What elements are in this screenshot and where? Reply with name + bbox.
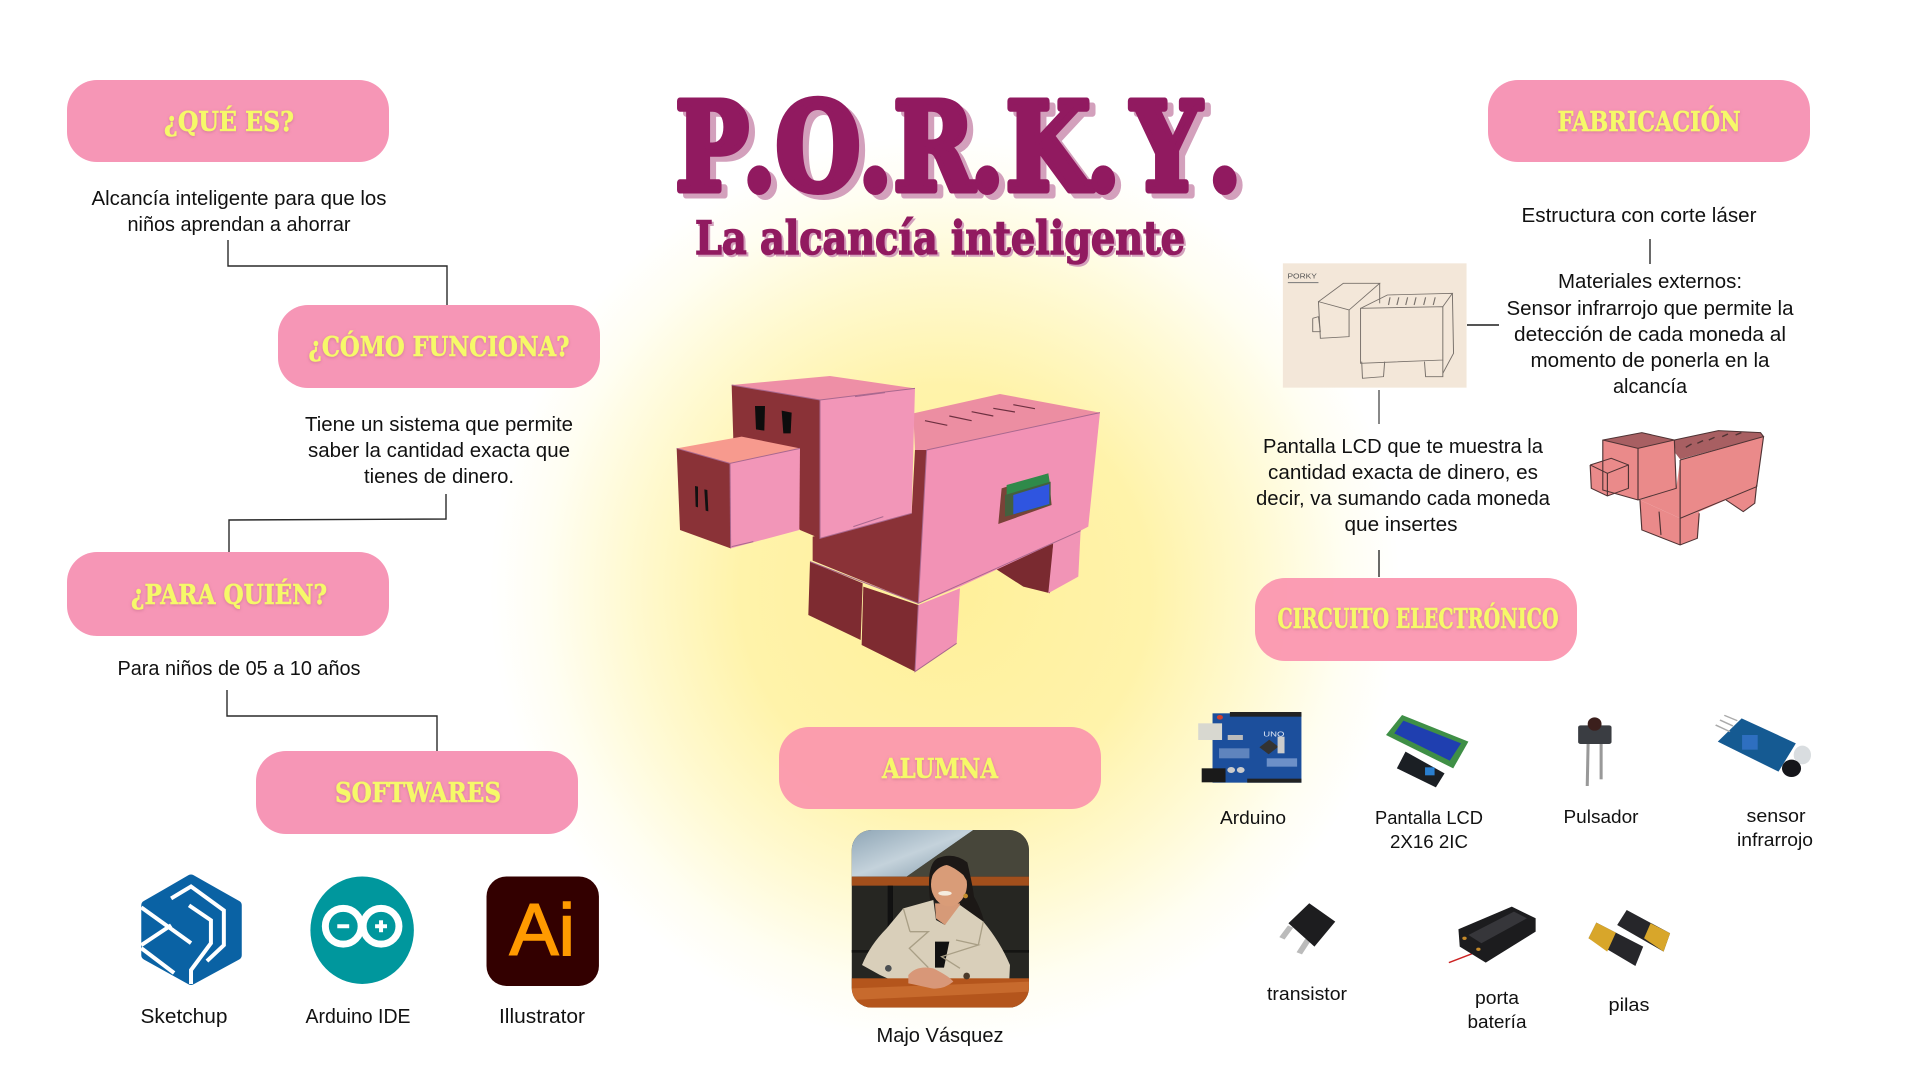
text: cómo funciona description: Tiene un sistema que permite bbox=[305, 414, 573, 436]
text: external materials bbox=[1506, 271, 1794, 398]
label: arduino: Arduino bbox=[1220, 807, 1286, 828]
text: lcd screen description: cantidad exacta de dinero, es bbox=[1268, 462, 1538, 484]
icon: battery holder bbox=[1449, 907, 1536, 963]
text: qué es description: Alcancía inteligente para que los bbox=[92, 188, 386, 210]
text: external materials: momento de ponerla en la bbox=[1530, 350, 1770, 372]
icon: 3d model of pig bbox=[1590, 431, 1764, 545]
heading pill: alumna: ALUMNA bbox=[881, 754, 999, 785]
text: qué es description bbox=[92, 188, 386, 236]
panel: alumna bbox=[779, 727, 1101, 1047]
label: battery holder bbox=[1468, 987, 1527, 1032]
sketch: hand drawn pig plan: PORKY bbox=[1287, 272, 1318, 280]
text: external materials: detección de cada moneda al bbox=[1514, 324, 1786, 346]
icon: arduino board bbox=[1198, 712, 1301, 783]
subtitle: La alcancía inteligente bbox=[695, 211, 1185, 265]
photo: student portrait bbox=[852, 830, 1029, 1008]
label: arduino ide: Arduino IDE bbox=[306, 1006, 410, 1028]
sketch: hand drawn pig plan bbox=[1283, 263, 1467, 388]
label: infrared sensor bbox=[1737, 805, 1813, 850]
connector: qué es to cómo funciona bbox=[228, 240, 447, 305]
heading pill: cómo funciona: ¿CÓMO FUNCIONA? bbox=[308, 329, 570, 363]
icon: illustrator logo: Ai bbox=[509, 888, 575, 971]
heading pill: qué es: ¿QUÉ ES? bbox=[164, 105, 294, 138]
title: P.O.R.K.Y. bbox=[675, 76, 1242, 220]
label: battery holder: batería bbox=[1468, 1011, 1527, 1032]
panel: qué es bbox=[67, 80, 389, 236]
heading pill: alumna bbox=[779, 727, 1101, 809]
icon: sketchup logo bbox=[141, 879, 237, 984]
label: student name: Majo Vásquez bbox=[876, 1025, 1004, 1047]
icon: arduino ide logo bbox=[310, 877, 414, 984]
connector: cómo funciona to para quién bbox=[229, 494, 446, 552]
heading pill: softwares bbox=[256, 751, 578, 834]
title: P.O.R.K.Y. bbox=[681, 81, 1248, 225]
panel: cómo funciona bbox=[278, 305, 600, 488]
text: lcd screen description: decir, va sumando cada moneda bbox=[1256, 488, 1551, 510]
label: lcd screen: Pantalla LCD bbox=[1375, 807, 1483, 828]
icon: transistor bbox=[1282, 903, 1335, 953]
label: lcd screen bbox=[1375, 807, 1483, 852]
heading pill: softwares: SOFTWARES bbox=[335, 778, 501, 809]
heading pill: circuito electrónico bbox=[1255, 578, 1577, 661]
icon: illustrator logo bbox=[487, 877, 599, 986]
label: transistor: transistor bbox=[1267, 983, 1347, 1004]
icon: arduino board: UNO bbox=[1263, 730, 1285, 738]
text: lcd screen description: Pantalla LCD que te muestra la bbox=[1263, 436, 1544, 458]
panel: softwares bbox=[140, 751, 599, 1028]
text: external materials: Sensor infrarrojo que permite la bbox=[1506, 298, 1794, 320]
text: external materials: Materiales externos: bbox=[1558, 271, 1742, 293]
text: cómo funciona description: tienes de dinero. bbox=[364, 466, 514, 488]
subtitle: La alcancía inteligente bbox=[697, 213, 1187, 267]
label: pulsador: Pulsador bbox=[1564, 806, 1638, 827]
connector: lcd text to circuit bbox=[1378, 550, 1380, 577]
panel: fabricación bbox=[1256, 80, 1810, 577]
heading pill: circuito electrónico: CIRCUITO ELECTRÓNICO bbox=[1278, 601, 1558, 635]
heading pill: fabricación: FABRICACIÓN bbox=[1558, 104, 1740, 138]
icon: infrared sensor bbox=[1716, 715, 1811, 777]
text: qué es description: niños aprendan a ahorrar bbox=[128, 214, 351, 236]
label: illustrator: Illustrator bbox=[499, 1006, 585, 1028]
label: batteries: pilas bbox=[1608, 994, 1650, 1015]
icon: push button bbox=[1578, 717, 1612, 786]
text: cómo funciona description: saber la cantidad exacta que bbox=[308, 440, 570, 462]
connector: laser text to materials bbox=[1649, 239, 1651, 264]
text: lcd screen description bbox=[1256, 436, 1551, 536]
text: laser cut structure: Estructura con corte láser bbox=[1522, 205, 1757, 227]
icon: lcd screen module bbox=[1386, 715, 1468, 787]
text: lcd screen description: que insertes bbox=[1344, 514, 1458, 536]
label: sketchup: Sketchup bbox=[140, 1006, 228, 1028]
label: lcd screen: 2X16 2IC bbox=[1390, 831, 1468, 852]
label: infrared sensor: sensor bbox=[1746, 805, 1806, 826]
heading pill: cómo funciona bbox=[278, 305, 600, 388]
heading pill: fabricación bbox=[1488, 80, 1810, 162]
text: external materials: alcancía bbox=[1613, 376, 1688, 398]
pig illustration: cardboard piggy bank bbox=[677, 376, 1100, 672]
label: battery holder: porta bbox=[1475, 987, 1520, 1008]
connector: sketch to materials bbox=[1467, 324, 1499, 326]
text: para quién description: Para niños de 05 a 10 años bbox=[118, 658, 360, 680]
icon: batteries bbox=[1589, 910, 1670, 966]
connector: sketch to lcd text bbox=[1378, 390, 1380, 424]
label: infrared sensor: infrarrojo bbox=[1737, 829, 1813, 850]
heading pill: para quién bbox=[67, 552, 389, 636]
connector: para quién to softwares bbox=[227, 690, 437, 751]
panel: para quién bbox=[67, 552, 389, 680]
panel: circuito electrónico bbox=[1198, 578, 1813, 1032]
heading pill: qué es bbox=[67, 80, 389, 162]
text: cómo funciona description bbox=[305, 414, 573, 488]
heading pill: para quién: ¿PARA QUIÉN? bbox=[131, 578, 327, 611]
